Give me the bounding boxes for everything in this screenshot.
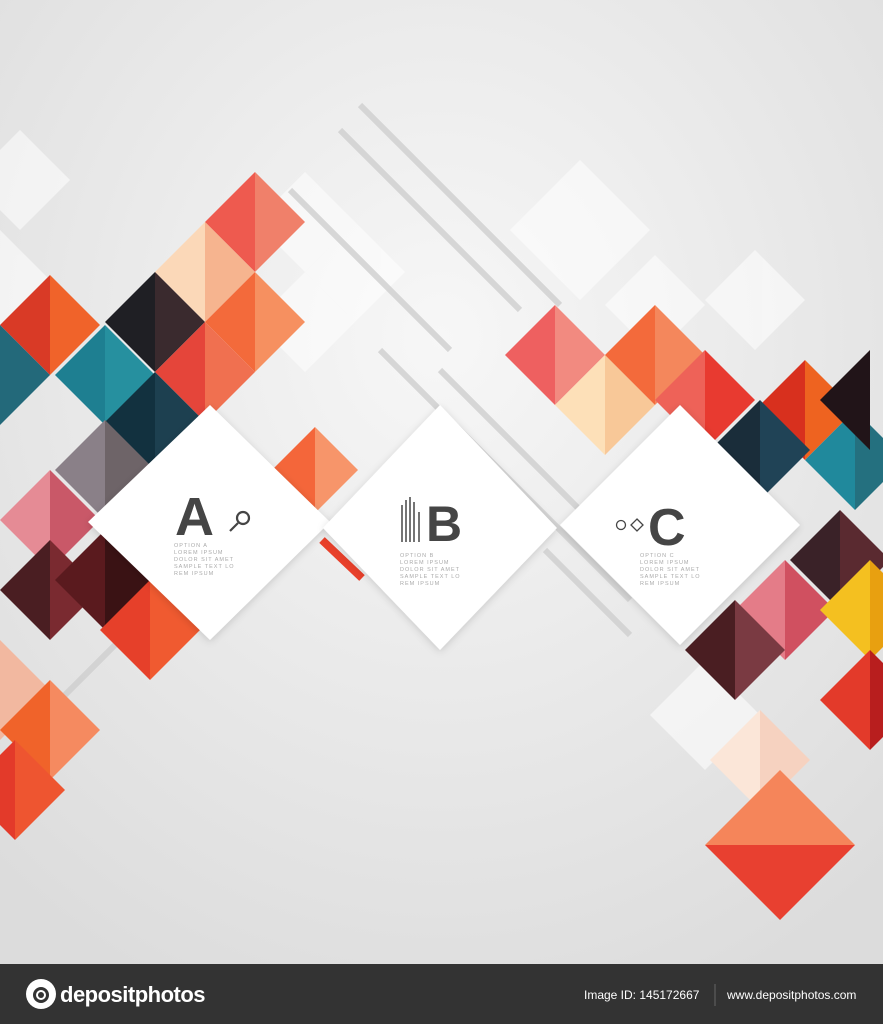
background translucent diamonds [0,130,805,770]
text B: SAMPLE TEXT LO [400,574,461,580]
letter C: C [648,499,686,557]
text A: SAMPLE TEXT LO [174,564,235,570]
text B: REM IPSUM [400,581,440,587]
right color cluster [505,305,883,920]
card A [88,405,330,640]
letter B: B [426,496,462,552]
logo icon [26,979,56,1009]
text A: OPTION A [174,543,208,549]
text C: OPTION C [640,553,675,559]
text A: REM IPSUM [174,571,214,577]
icon: magnifier [230,512,249,531]
website: www.depositphotos.com [726,988,856,1002]
card C [560,405,800,645]
card B [323,405,557,650]
image id: Image ID: 145172667 [584,988,700,1002]
letter A: A [175,487,214,547]
text C: DOLOR SIT AMET [640,567,700,573]
small orange diamond [272,427,358,513]
text C: LOREM IPSUM [640,560,690,566]
icon: circle and diamond [616,519,643,531]
text B: LOREM IPSUM [400,560,450,566]
icon: bars [402,497,419,542]
logo text: depositphotos [60,982,205,1007]
text B: OPTION B [400,553,434,559]
left color cluster [0,172,305,840]
red stroke [322,540,362,578]
text C: SAMPLE TEXT LO [640,574,701,580]
footer bar [0,964,883,1024]
text A: DOLOR SIT AMET [174,557,234,563]
text C: REM IPSUM [640,581,680,587]
text B: DOLOR SIT AMET [400,567,460,573]
diagonal lines [60,105,640,700]
text A: LOREM IPSUM [174,550,224,556]
